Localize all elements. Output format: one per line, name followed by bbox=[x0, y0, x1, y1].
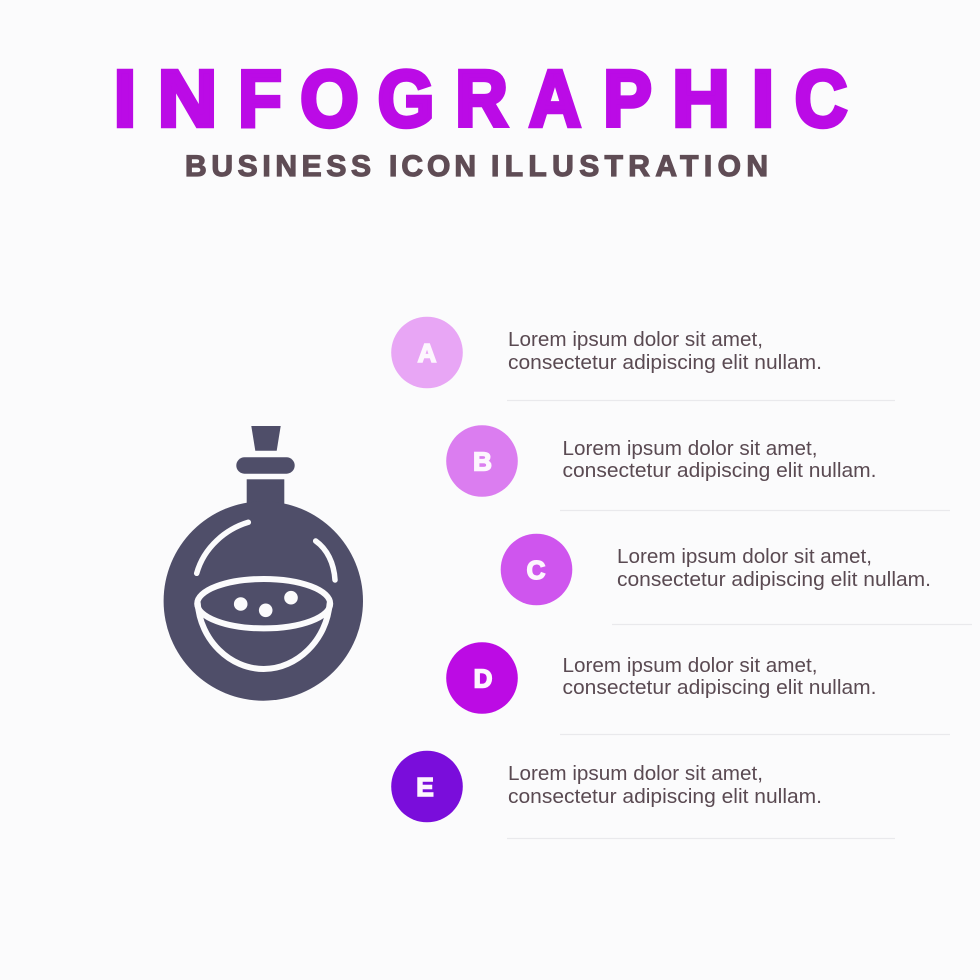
badge A bbox=[391, 317, 463, 388]
badge A: A bbox=[418, 338, 437, 368]
badge E: E bbox=[416, 772, 434, 802]
text B bbox=[562, 438, 876, 482]
title: H bbox=[672, 54, 730, 143]
text C: consectetur adipiscing elit nullam. bbox=[617, 569, 931, 591]
badge B bbox=[446, 425, 518, 497]
text E bbox=[508, 763, 822, 808]
title: I bbox=[752, 55, 774, 144]
item A bbox=[391, 317, 895, 400]
subtitle: BUSINESS bbox=[185, 150, 371, 183]
title: N bbox=[158, 54, 217, 144]
subtitle: ICON bbox=[389, 150, 476, 183]
item E bbox=[391, 751, 895, 838]
item B bbox=[446, 425, 950, 510]
flask bubbles bbox=[234, 591, 298, 617]
text B: Lorem ipsum dolor sit amet, bbox=[562, 438, 818, 460]
text A: Lorem ipsum dolor sit amet, bbox=[508, 329, 763, 351]
text D: Lorem ipsum dolor sit amet, bbox=[562, 655, 818, 677]
badge D bbox=[446, 642, 518, 714]
text B: consectetur adipiscing elit nullam. bbox=[562, 460, 876, 482]
title: O bbox=[300, 55, 359, 143]
title: G bbox=[378, 55, 434, 144]
subtitle: ILLUSTRATION bbox=[491, 150, 768, 183]
title: A bbox=[529, 54, 581, 144]
badge B: B bbox=[473, 446, 492, 476]
flask stopper bbox=[251, 426, 281, 451]
title: I bbox=[114, 55, 136, 144]
item C bbox=[501, 534, 972, 624]
text A: consectetur adipiscing elit nullam. bbox=[508, 352, 822, 374]
text C bbox=[617, 546, 931, 591]
text C: Lorem ipsum dolor sit amet, bbox=[617, 546, 872, 568]
text D: consectetur adipiscing elit nullam. bbox=[562, 677, 876, 699]
title: F bbox=[238, 54, 282, 144]
icon: round flask bbox=[164, 426, 363, 701]
text E: consectetur adipiscing elit nullam. bbox=[508, 786, 822, 808]
item D bbox=[446, 642, 950, 734]
flask liquid bowl bbox=[197, 579, 330, 669]
flask highlights bbox=[197, 522, 335, 580]
text E: Lorem ipsum dolor sit amet, bbox=[508, 763, 763, 785]
badge C: C bbox=[527, 555, 546, 585]
flask collar bbox=[236, 457, 295, 474]
text A bbox=[508, 329, 822, 374]
badge C bbox=[501, 534, 572, 605]
title: R bbox=[455, 55, 508, 144]
subtitle bbox=[185, 150, 768, 183]
title: P bbox=[603, 55, 652, 144]
text D bbox=[562, 655, 876, 699]
title: C bbox=[795, 55, 847, 144]
badge E bbox=[391, 751, 463, 822]
title bbox=[114, 54, 847, 144]
flask body bbox=[164, 479, 363, 701]
badge D: D bbox=[474, 664, 492, 694]
